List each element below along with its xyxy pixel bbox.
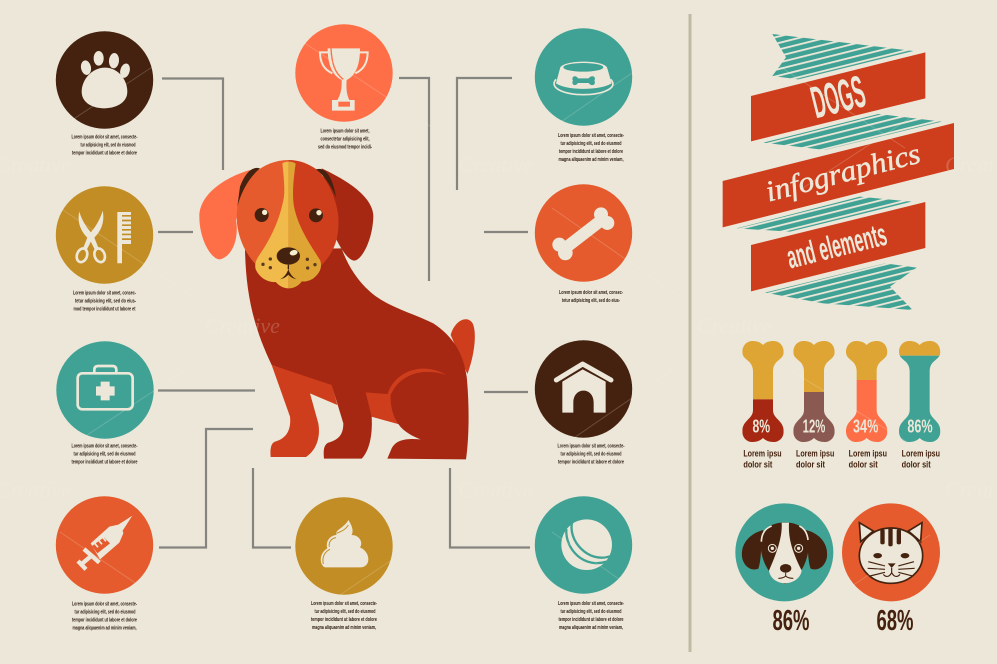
text: poop: tempor incididunt ut labore et dolore	[311, 617, 377, 623]
cat statistic	[842, 503, 940, 601]
text: paw: Lorem ipsum dolor sit amet, consecte-	[72, 135, 138, 141]
bone: 34%: 34%	[853, 415, 879, 436]
bone labels: dolor sit	[796, 459, 825, 469]
text: ball: Lorem ipsum dolor sit amet, consecte-	[558, 601, 624, 607]
text: paw	[72, 135, 138, 157]
text: ball: tempor incididunt ut labore et dolore	[558, 617, 624, 623]
icon: paw circle	[56, 31, 153, 129]
bone labels: Lorem ipsu	[849, 449, 887, 459]
watermark: Creative	[458, 152, 533, 177]
text: bowl: Lorem ipsum dolor sit amet, consecte-	[558, 133, 624, 139]
text: poop: Lorem ipsum dolor sit amet, consecte-	[311, 601, 377, 607]
icon: dog bowl circle	[535, 28, 632, 126]
watermark: Creative	[458, 477, 533, 502]
icon: poop circle	[295, 497, 393, 595]
connector lines	[158, 78, 530, 548]
bone labels: Lorem ipsu	[796, 449, 834, 459]
text: bone: tetur adipisicing elit, sed do eius-	[562, 298, 620, 304]
bone labels: Lorem ipsu	[902, 449, 940, 459]
text: house: tempor incididunt ut labore et dolore	[558, 459, 624, 465]
text: poop	[311, 601, 377, 631]
band: and elements	[751, 202, 925, 291]
icon: syringe circle	[56, 496, 153, 594]
text: scissors: Lorem ipsum dolor sit amet, consec-	[73, 291, 136, 297]
text: syringe: tempor incididunt ut labore et dolore	[72, 618, 137, 624]
band: infographics	[723, 123, 954, 227]
text: bowl: tur adipisicing elit, sed do eiusmod	[560, 141, 622, 147]
text: scissors: mod tempor incididunt ut labore et	[74, 307, 136, 313]
text: paw: tur adipisicing elit, sed do eiusmod	[80, 143, 136, 149]
icon: medical kit circle	[56, 341, 154, 439]
bone percentage chart	[742, 341, 940, 468]
icon: ball circle	[535, 496, 632, 594]
text: poop: magna aliquaenim ad minim veniam,	[312, 625, 376, 631]
text: scissors	[73, 291, 136, 313]
dog statistic	[735, 503, 833, 601]
text: bowl: tempor incididunt ut labore et dolore	[559, 149, 623, 155]
bone labels: Lorem ipsu	[743, 449, 782, 459]
text: bowl: magna aliquaenim ad minim veniam,	[558, 157, 624, 163]
bone labels	[743, 449, 940, 469]
icon: scissors and comb circle	[56, 186, 153, 284]
bone labels: dolor sit	[902, 459, 931, 469]
watermark: Creative	[697, 313, 772, 338]
icon: dog house circle	[535, 340, 632, 438]
bone: 8%: 8%	[752, 415, 770, 436]
vertical divider	[688, 14, 692, 652]
bone: 12%: 12%	[803, 415, 826, 436]
bone: 12%	[793, 341, 835, 442]
text: medical kit: tur adipisicing elit, sed do eiusmod	[74, 452, 136, 458]
dog illustration	[199, 160, 475, 459]
text: poop: tur adipisicing elit, sed do eiusmod	[314, 609, 376, 615]
bone labels: dolor sit	[743, 459, 772, 469]
text: syringe: magna aliquaenim ad minim veniam,	[72, 626, 137, 632]
text: syringe	[72, 602, 137, 632]
title ribbon	[723, 34, 954, 310]
text: medical kit	[72, 444, 138, 466]
stat value: dog: 86%	[772, 605, 810, 637]
stat value: cat: 68%	[876, 605, 914, 637]
ribbon fold: upper	[763, 114, 942, 150]
band: DOGS	[751, 52, 925, 141]
text: trophy: sed do eiusmod tempor incidi-	[318, 145, 372, 151]
text: paw: tempor incididunt ut labore et dolore	[72, 151, 137, 157]
text: syringe: Lorem ipsum dolor sit amet, consecte-	[72, 602, 137, 608]
text: trophy	[318, 129, 372, 151]
text: ball: magna aliquaenim ad minim veniam,	[559, 625, 623, 631]
text: syringe: tur adipisicing elit, sed do eiusmod	[74, 610, 136, 616]
text: trophy: consectetur adipisicing elit,	[320, 137, 370, 143]
icon: bone circle	[535, 184, 632, 282]
bone: 8%	[742, 341, 784, 442]
ribbon tail: top	[772, 34, 913, 79]
bone: 34%	[846, 341, 888, 442]
band: DOGS: DOGS	[806, 66, 870, 128]
text: bowl	[558, 133, 624, 163]
ribbon tail: bottom	[765, 263, 917, 310]
watermark: Creative	[205, 313, 280, 338]
band: and elements: and elements	[783, 216, 890, 275]
bone: 86%	[899, 341, 940, 442]
bone labels: dolor sit	[849, 459, 878, 469]
icon: trophy circle	[295, 24, 393, 122]
text: scissors: tetur adipisicing elit, sed do eius-	[75, 299, 136, 305]
text: medical kit: Lorem ipsum dolor sit amet, consecte-	[72, 444, 138, 450]
text: house	[558, 443, 625, 465]
text: ball: tur adipisicing elit, sed do eiusmod	[560, 609, 622, 615]
text: house: tur adipisicing elit, sed do eiusmod	[560, 451, 622, 457]
text: medical kit: tempor incididunt ut labore et dolore	[72, 460, 138, 466]
ribbon fold: lower	[737, 197, 912, 232]
band: infographics: infographics	[762, 138, 924, 208]
bone: 86%: 86%	[907, 415, 933, 436]
text: trophy: Lorem ipsum dolor sit amet,	[320, 129, 370, 135]
text: ball	[558, 601, 624, 631]
text: bone: Lorem ipsum dolor sit amet, consec-	[559, 290, 623, 296]
text: bone	[559, 290, 623, 304]
text: house: Lorem ipsum dolor sit amet, consecte-	[558, 443, 625, 449]
